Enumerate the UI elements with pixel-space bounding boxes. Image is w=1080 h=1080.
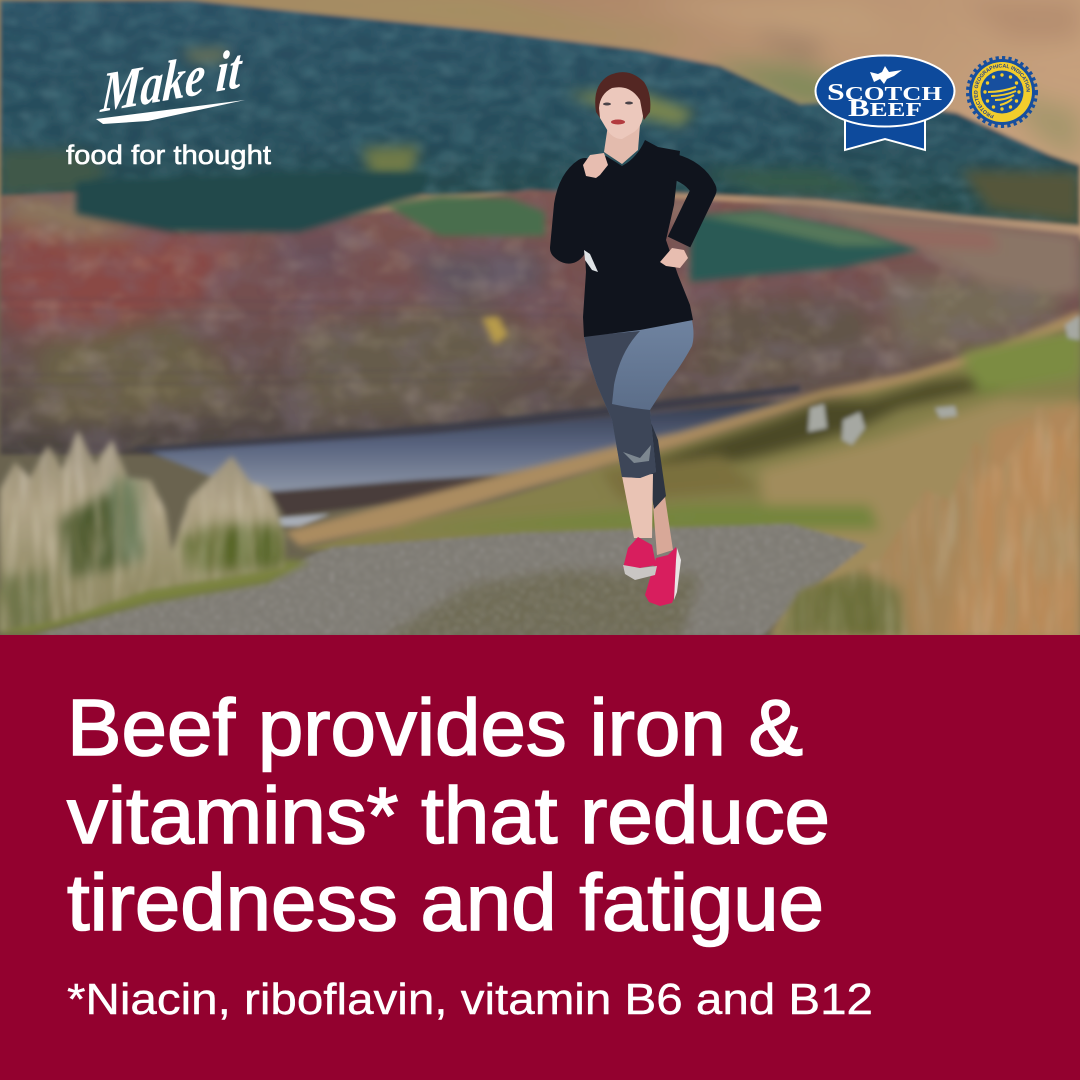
tufts: green hearts: [0, 475, 285, 632]
background: forest behind runner: [690, 212, 920, 282]
background: green forest band: [385, 196, 545, 236]
logo: tagline: food for thought: [66, 140, 272, 170]
right grass: orange mass: [950, 410, 1080, 640]
runner: hip hand: [660, 248, 688, 268]
background: orange bank ridge: [285, 310, 1080, 546]
tufts: light blades: [0, 420, 300, 635]
seal: yellow ring: [972, 62, 1032, 122]
background: mossy right slope: [308, 364, 1080, 552]
logo: underline swoosh: [96, 100, 245, 124]
background: slope colour areas: [491, 329, 1080, 635]
background: left grass tufts: [0, 420, 300, 635]
background: pale moor far right: [735, 200, 1080, 295]
runner: far arm: [672, 166, 704, 242]
background: stones on bank: [808, 315, 1080, 445]
background: green top of near forest: [700, 212, 900, 246]
runner: raised hand: [583, 153, 608, 178]
runner: far shoe: [645, 547, 680, 606]
background: lake light strip: [278, 514, 330, 526]
photo: soft landscape background: [0, 0, 1080, 650]
runner: eyes: [603, 102, 633, 106]
background: lake: [150, 398, 815, 494]
background: base ground: [0, 238, 1080, 635]
background: lake reflection: [270, 476, 500, 516]
runner: leggings dark shading: [584, 331, 656, 478]
runner: near arm: [562, 170, 592, 252]
runner: near shin: [622, 474, 653, 538]
background: conifer forest: [0, 0, 1080, 240]
hill: light tree clumps: [1, 200, 1014, 454]
forest: light tree texture: [22, 3, 1032, 203]
logo: protected geographical indication seal: [966, 56, 1038, 128]
right grass: light blades: [760, 400, 1080, 640]
runner: leggings mesh panel: [623, 445, 651, 463]
tufts: dark blades: [0, 420, 300, 635]
forest: autumn patches: [0, 48, 1080, 224]
logo: Scotch Beef badge: [816, 56, 954, 150]
path: base colour: [36, 522, 866, 635]
panel: crimson text block: [0, 635, 1080, 1080]
badge: ribbon: [845, 120, 925, 150]
seal: field lines: [988, 87, 1016, 105]
hill: dark tree clumps: [0, 185, 1080, 460]
right grass: green tuft: [775, 570, 905, 640]
hill: autumn colour blotches: [0, 196, 1060, 420]
panel background: [0, 635, 1080, 1080]
background: left ground green: [0, 560, 310, 634]
runner: near shoe sole: [623, 565, 657, 580]
seal: ring text: PROTECTED GEOGRAPHICAL INDICATION: [974, 64, 1030, 118]
path: light gravel: [81, 527, 852, 635]
hill: yellow tree: [482, 316, 508, 345]
logo: Make it script: Make it: [98, 36, 245, 125]
runner: white detail: [584, 250, 598, 272]
path: mossy centre: [380, 570, 700, 640]
runner: hair: [595, 72, 650, 120]
background: mountain shading: [711, 2, 1080, 160]
path: dark gravel: [433, 592, 634, 628]
headline: [67, 683, 830, 947]
badge: Scotch: SCOTCH: [827, 80, 943, 106]
background: bank shadow: [660, 371, 984, 467]
seal: blue centre: [980, 70, 1024, 114]
runner: far calf legging: [646, 410, 666, 509]
background: far lake shore: [130, 385, 800, 456]
background: gravel path: [35, 522, 866, 635]
badge: Beef: B EEF: [848, 96, 922, 122]
runner: neck: [604, 125, 640, 164]
footnote: *Niacin, riboflavin, vitamin B6 and B12: [67, 975, 873, 1024]
background: power lines: [0, 298, 600, 386]
runner: face: [599, 87, 643, 139]
headline line 1: Beef provides iron &: [67, 683, 803, 772]
runner: lips: [611, 120, 625, 124]
headline line 3: tiredness and fatigue: [67, 858, 824, 947]
background: right grass: [760, 400, 1080, 640]
background: dark forest left: [76, 172, 430, 232]
badge: thistle icon: [870, 66, 902, 84]
right grass: dark blades: [760, 400, 1080, 640]
runner: near shoe: [623, 537, 656, 568]
photo: runner on a Scottish hillside: [0, 0, 1080, 635]
tufts: pale base: [0, 430, 288, 620]
badge: oval: [816, 56, 954, 126]
runner: [562, 72, 704, 606]
runner: far shoe sole: [674, 548, 681, 600]
seal: serrated edge: [968, 58, 1036, 126]
runner: torso: [583, 140, 693, 337]
hill: base colour: [0, 185, 1080, 460]
runner: leggings: [584, 320, 694, 478]
headline line 2: vitamins* that reduce: [67, 771, 830, 860]
background: pink moor streak: [880, 230, 990, 247]
seal: stars: [983, 73, 1021, 111]
runner: far calf skin: [653, 497, 673, 555]
background: distant mountain: [0, 0, 1080, 240]
logo: Make it food for thought: [66, 36, 272, 170]
forest: base colour: [0, 0, 1080, 240]
background: heather hillside: [0, 185, 1080, 460]
right grass: tan base: [760, 400, 1080, 640]
seal: blue ring: [969, 59, 1035, 125]
forest: dark tree texture: [1, 0, 1043, 222]
